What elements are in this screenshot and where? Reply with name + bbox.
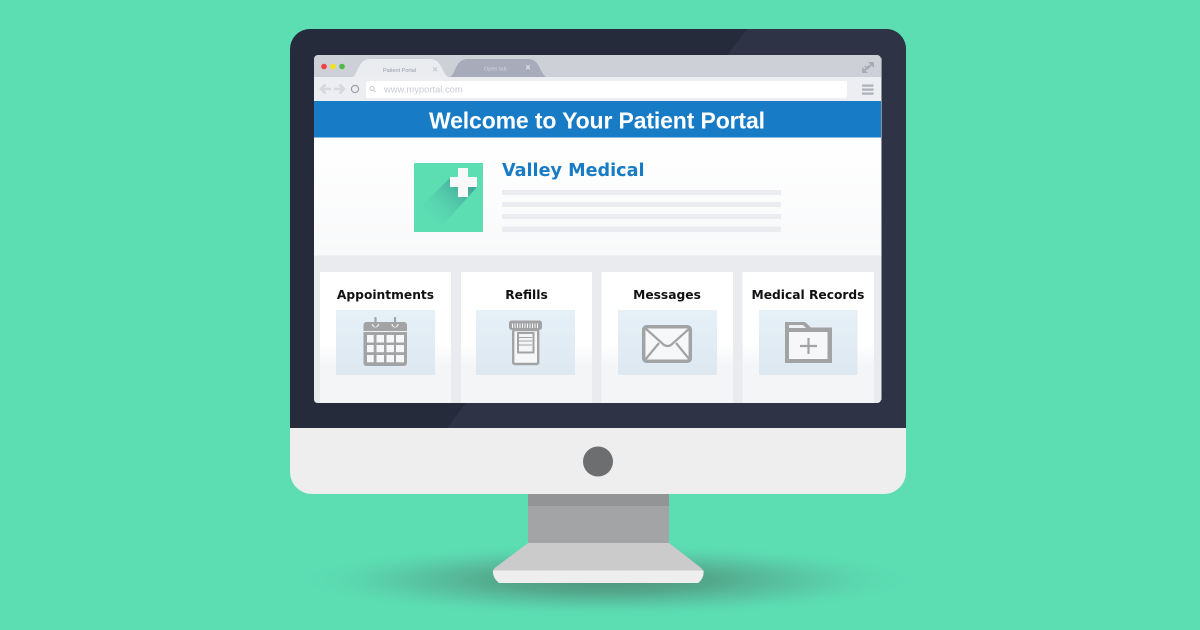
label: Medical Records xyxy=(752,288,864,302)
card: appointments xyxy=(320,272,451,403)
monitor chin xyxy=(290,428,906,494)
card: medical records xyxy=(742,272,874,403)
active tab xyxy=(353,59,448,77)
browser window xyxy=(314,55,882,403)
label: Messages xyxy=(633,288,701,302)
card: refills xyxy=(461,272,592,403)
monitor xyxy=(290,29,906,583)
inactive tab xyxy=(450,59,546,77)
tab bar xyxy=(314,55,881,77)
inactive tab: Open tab xyxy=(484,66,507,72)
navigation section xyxy=(314,256,881,403)
active tab: Patient Portal xyxy=(383,68,416,74)
power button xyxy=(583,446,613,476)
inactive tab: × xyxy=(525,62,531,72)
clinic name: Valley Medical xyxy=(502,161,645,181)
label: Refills xyxy=(505,288,548,302)
window control dots xyxy=(321,64,345,69)
clinic logo xyxy=(414,163,483,232)
address bar strip xyxy=(314,77,881,101)
clinic header panel xyxy=(314,138,881,256)
label: Appointments xyxy=(337,288,434,302)
icon: pill bottle xyxy=(509,320,542,364)
placeholder text lines xyxy=(502,190,781,232)
back and forward arrows xyxy=(321,84,344,94)
monitor stand xyxy=(493,494,704,583)
icon: envelope xyxy=(644,327,690,361)
menu icon xyxy=(862,84,874,95)
monitor bezel xyxy=(290,29,906,428)
url field: www.myportal.com xyxy=(383,84,463,94)
title banner: Welcome to Your Patient Portal xyxy=(429,108,765,134)
floor shadow xyxy=(296,543,916,617)
expand icon xyxy=(862,62,874,73)
title banner xyxy=(314,101,881,138)
screen bottom corners xyxy=(314,399,881,403)
reload icon xyxy=(351,85,359,93)
card: messages xyxy=(602,272,733,403)
url field xyxy=(366,81,847,98)
active tab: × xyxy=(432,64,438,74)
icon: folder with plus xyxy=(785,322,832,363)
icon: calendar xyxy=(364,318,407,366)
screen edge xyxy=(881,58,882,400)
